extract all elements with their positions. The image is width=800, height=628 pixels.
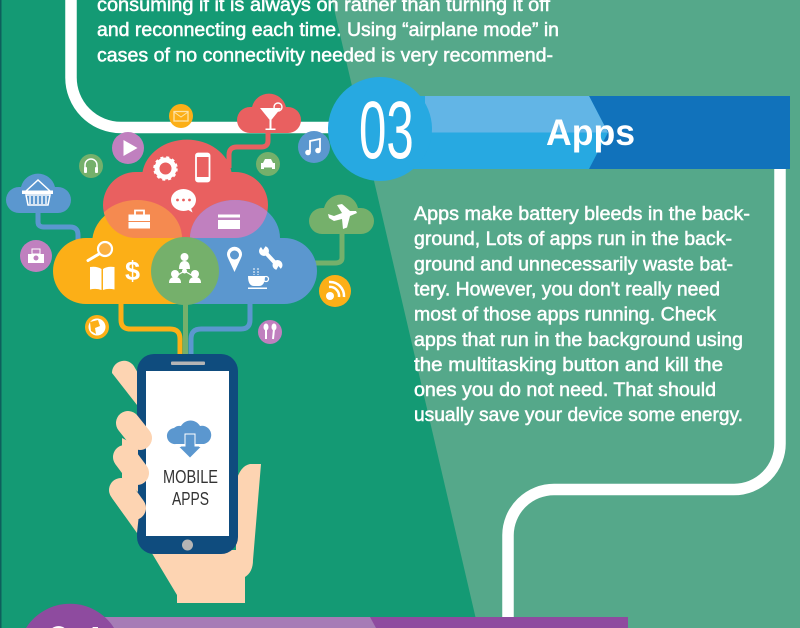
phone body [137, 354, 238, 554]
icon: gear [154, 158, 176, 180]
big cloud: blue [185, 200, 317, 304]
icon: people network [169, 253, 201, 283]
header band: 03 Apps [328, 77, 790, 181]
number 03: 03 [359, 85, 414, 176]
text block: top paragraph: cases of no connectivity needed is very recommend- [97, 46, 553, 66]
text block: apps paragraph: most of those apps running. Check [414, 305, 717, 326]
small icon: cutlery [258, 320, 282, 344]
overlap: blue and red [190, 200, 268, 238]
big cloud: orange [53, 200, 186, 304]
small cloud: airplane [309, 195, 374, 234]
text block: apps paragraph: usually save your device some energy. [414, 405, 743, 426]
icon: wrench [259, 246, 282, 270]
small cloud: cocktail [237, 94, 301, 133]
icon: shopping basket [22, 180, 53, 205]
icon: briefcase [128, 210, 150, 228]
icon: speech bubble [171, 189, 196, 212]
hand: thumb and palm behind phone [112, 361, 261, 603]
text block: apps paragraph: ground, Lots of apps run in the back- [414, 229, 732, 250]
text block: top paragraph: and reconnecting each time. Using “airplane mode” in [97, 20, 559, 41]
text block: top paragraph [97, 0, 559, 66]
big cloud: red [103, 140, 268, 238]
hand and phone [112, 354, 261, 603]
icon: cloud download [167, 421, 211, 458]
text block: apps paragraph: Apps make battery bleeds in the back- [414, 204, 750, 225]
icon: smartphone [196, 154, 210, 182]
small icon: car [256, 152, 280, 176]
small icon: play [112, 132, 144, 164]
icon: coffee cup [248, 268, 268, 289]
icon: credit card [218, 214, 240, 229]
small icon: music [298, 131, 330, 163]
small icon: mail [169, 104, 193, 128]
icon: magnifier [88, 242, 112, 260]
small icon: globe [85, 315, 109, 339]
icon: open book [90, 267, 114, 290]
text block: apps paragraph: ground and unnecessarily waste bat- [414, 254, 733, 276]
text block: apps paragraph: ones you do not need. That should [414, 380, 716, 401]
text block: apps paragraph: tery. However, you don't really need [414, 280, 720, 300]
icon: map pin [227, 247, 242, 272]
small icon: headphones [79, 154, 103, 178]
small icon: camera [20, 240, 52, 272]
text block: apps paragraph [414, 204, 750, 426]
illustration wires [38, 130, 342, 358]
hand: fingers over phone [112, 423, 140, 533]
heading: Apps: Apps [546, 112, 635, 153]
small icon: rss [319, 275, 351, 307]
small cloud: basket [6, 174, 71, 213]
overlap: orange and red [104, 200, 182, 238]
icon: martini [260, 103, 282, 130]
icon: airplane [328, 204, 357, 229]
phone label: APPS [172, 489, 209, 509]
text block: apps paragraph: apps that run in the background using [414, 330, 743, 351]
header band: 04 [26, 604, 628, 628]
phone label: MOBILE [163, 467, 218, 487]
center circle: network [151, 237, 219, 305]
text block: apps paragraph: the multitasking button and kill the [414, 355, 723, 376]
phone label [163, 467, 218, 509]
icon: dollar: $ [125, 256, 140, 286]
